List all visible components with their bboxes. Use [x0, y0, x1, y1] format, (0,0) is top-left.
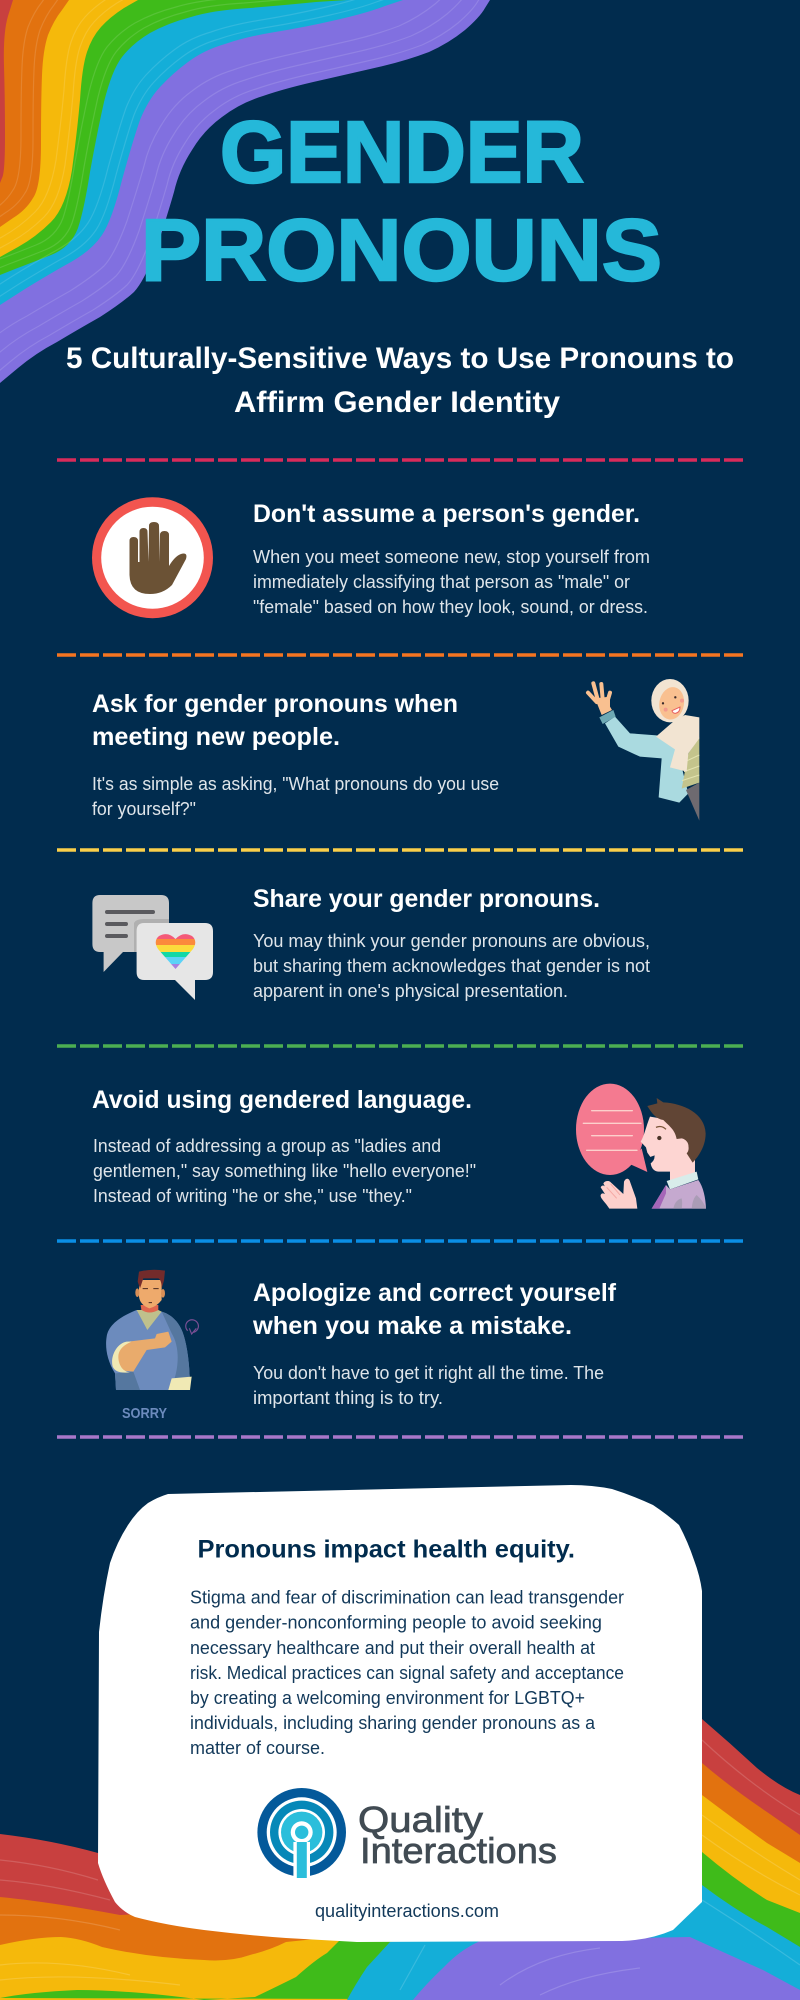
- text block: You don't have to get it right all the time. The: [253, 1362, 604, 1383]
- icon: man apologizing: [106, 1270, 198, 1390]
- subtitle: [66, 342, 734, 419]
- text block: risk. Medical practices can signal safety and acceptance: [190, 1662, 624, 1683]
- text block: matter of course.: [190, 1737, 325, 1758]
- text block: Stigma and fear of discrimination can lead transgender: [190, 1587, 624, 1608]
- text block: [253, 546, 650, 617]
- text block: [190, 1587, 624, 1758]
- panel: avoid gendered language: [92, 1084, 706, 1209]
- panel: apologize: [106, 1270, 617, 1422]
- top rainbow paint swirl: [0, 0, 490, 383]
- logo: quality interactions: Quality: [358, 1799, 483, 1840]
- text block: Instead of addressing a group as "ladies and: [93, 1135, 441, 1156]
- text block: important thing is to try.: [253, 1387, 443, 1408]
- text block: and gender-nonconforming people to avoid seeking: [190, 1612, 602, 1633]
- title: [141, 104, 662, 299]
- heading: [92, 690, 458, 751]
- text block: by creating a welcoming environment for LGBTQ+: [190, 1687, 585, 1708]
- heading: Avoid using gendered language.: [92, 1086, 472, 1114]
- text block: immediately classifying that person as "male" or: [253, 571, 630, 592]
- heading: Don't assume a person's gender.: [253, 500, 640, 528]
- icon: stop hand: [92, 497, 213, 618]
- panel: don't assume: [92, 497, 650, 618]
- icon: waving woman in hijab: [588, 679, 699, 821]
- subtitle: Affirm Gender Identity: [234, 386, 561, 419]
- heading: meeting new people.: [92, 723, 340, 751]
- icon: chat bubbles with rainbow heart: [92, 895, 213, 1000]
- website url: qualityinteractions.com: [315, 1900, 499, 1921]
- heading: when you make a mistake.: [252, 1312, 572, 1340]
- text block: [92, 773, 499, 819]
- heading: Pronouns impact health equity.: [198, 1536, 575, 1564]
- heading: Ask for gender pronouns when: [92, 690, 458, 718]
- panel: share pronouns: [92, 885, 650, 1001]
- text block: When you meet someone new, stop yourself from: [253, 546, 650, 567]
- panel: ask for pronouns: [92, 679, 699, 821]
- label: sorry: SORRY: [122, 1405, 167, 1422]
- text block: apparent in one's physical presentation.: [253, 980, 568, 1001]
- logo: quality interactions: [257, 1788, 557, 1878]
- text block: but sharing them acknowledges that gender is not: [253, 955, 650, 976]
- logo: quality interactions: Interactions: [360, 1830, 557, 1871]
- text block: [253, 1362, 604, 1408]
- text block: individuals, including sharing gender pronouns as a: [190, 1712, 596, 1733]
- text block: "female" based on how they look, sound, or dress.: [253, 596, 648, 617]
- subtitle: 5 Culturally-Sensitive Ways to Use Pronouns to: [66, 342, 734, 375]
- panel: health equity card: [98, 1485, 702, 1942]
- title: PRONOUNS: [141, 202, 662, 299]
- text block: You may think your gender pronouns are obvious,: [253, 930, 650, 951]
- icon: man speaking with speech bubble: [576, 1084, 706, 1209]
- bottom rainbow paint swirl: [0, 1719, 800, 2000]
- title: GENDER: [220, 104, 584, 201]
- heading: Share your gender pronouns.: [253, 885, 600, 913]
- text block: [253, 930, 650, 1001]
- text block: Instead of writing "he or she," use "they.": [93, 1185, 412, 1206]
- text block: [93, 1135, 476, 1206]
- card shape: [98, 1485, 702, 1942]
- text block: for yourself?": [92, 798, 196, 819]
- heading: [252, 1279, 617, 1340]
- text block: gentlemen," say something like "hello everyone!": [93, 1160, 476, 1181]
- text block: necessary healthcare and put their overall health at: [190, 1637, 595, 1658]
- text block: It's as simple as asking, "What pronouns do you use: [92, 773, 499, 794]
- heading: Apologize and correct yourself: [253, 1279, 617, 1307]
